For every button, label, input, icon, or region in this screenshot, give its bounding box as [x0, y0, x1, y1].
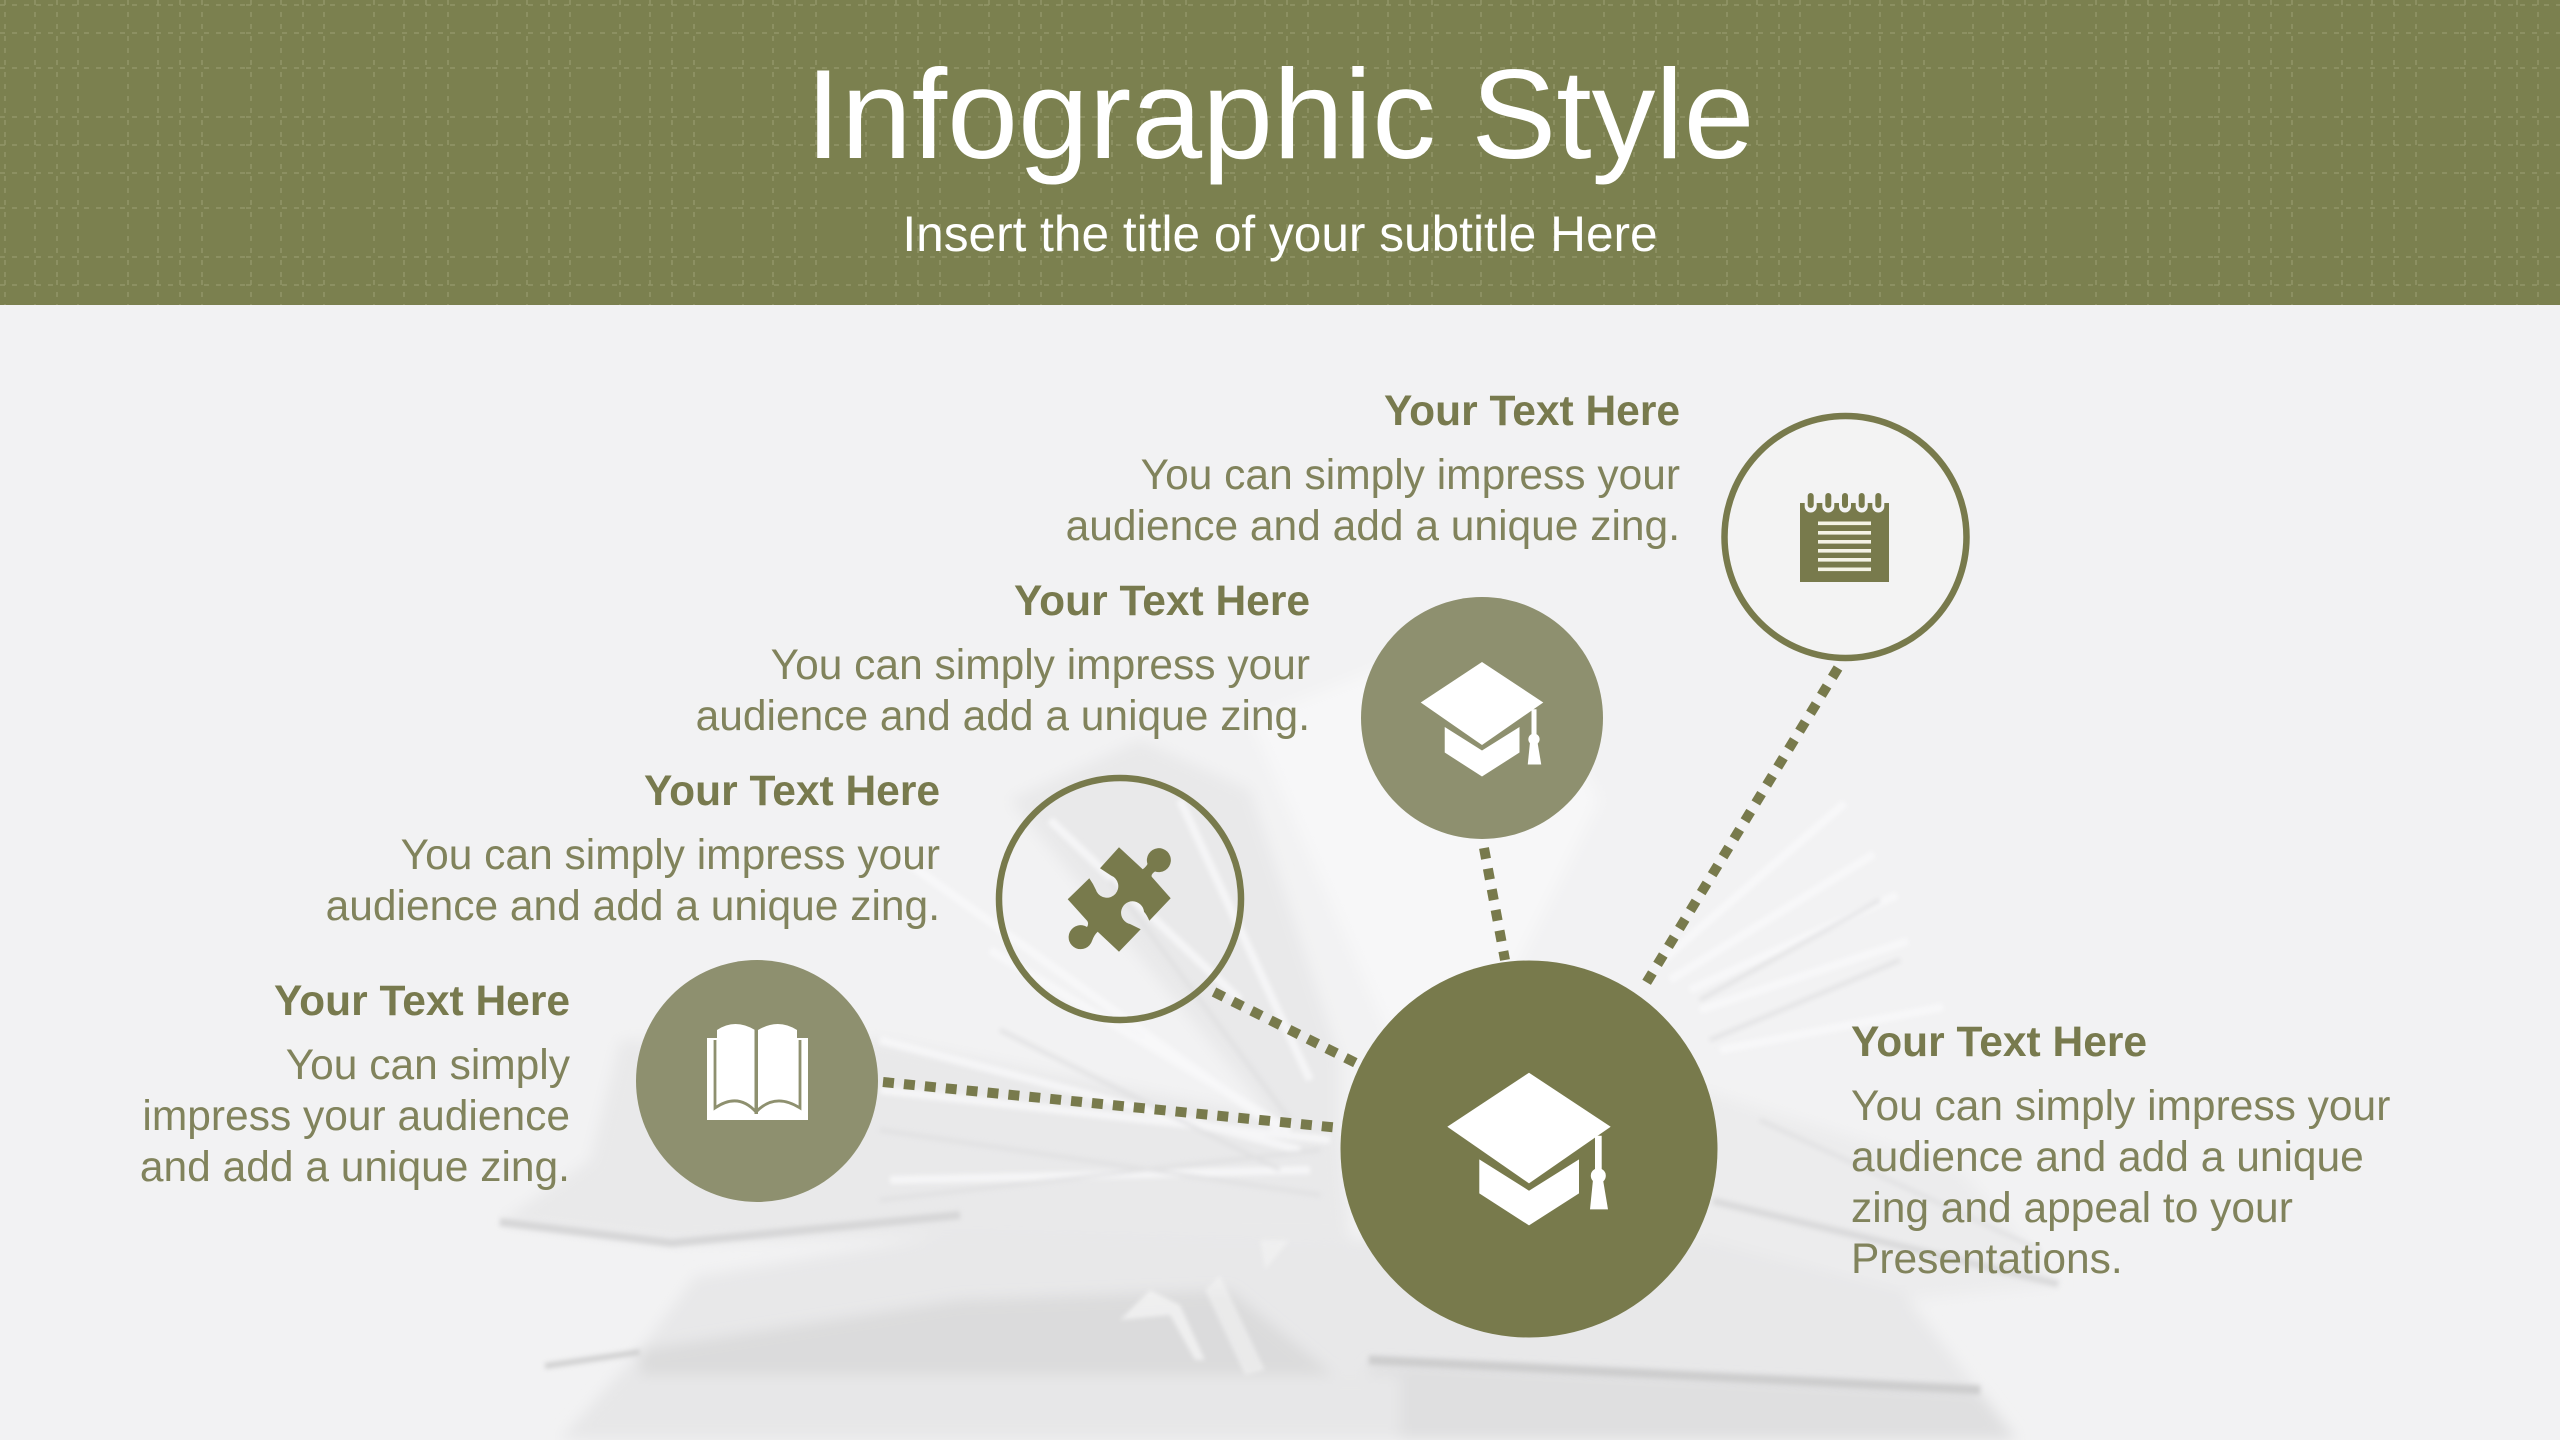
- text block: graduation: [696, 578, 1310, 740]
- text block: notepad: audience and add a unique zing.: [1066, 503, 1680, 550]
- text block: puzzle: Your Text Here: [644, 768, 940, 815]
- text block: main: Presentations.: [1851, 1236, 2123, 1283]
- icon: open book: [707, 1024, 808, 1120]
- icon: puzzle piece: [1068, 847, 1171, 952]
- text block: puzzle: You can simply impress your: [401, 832, 940, 879]
- text block: book: [140, 978, 570, 1191]
- text block: book: You can simply: [286, 1042, 570, 1089]
- text block: main: [1851, 1019, 2390, 1283]
- text block: main: You can simply impress your: [1851, 1083, 2390, 1130]
- text block: graduation: audience and add a unique zing.: [696, 693, 1310, 740]
- text block: notepad: [1066, 388, 1680, 550]
- text block: puzzle: [326, 768, 940, 930]
- text block: book: Your Text Here: [274, 978, 570, 1025]
- text block: puzzle: audience and add a unique zing.: [326, 883, 940, 930]
- icon: graduation cap small: [1421, 662, 1543, 777]
- header band: [0, 0, 2560, 305]
- text block: graduation: Your Text Here: [1014, 578, 1310, 625]
- text block: main: Your Text Here: [1851, 1019, 2147, 1066]
- subtitle: Insert the title of your subtitle Here: [902, 206, 1658, 262]
- text block: notepad: Your Text Here: [1384, 388, 1680, 435]
- text block: graduation: You can simply impress your: [771, 642, 1310, 689]
- text block: book: and add a unique zing.: [140, 1144, 570, 1191]
- text block: notepad: You can simply impress your: [1141, 452, 1680, 499]
- text block: main: zing and appeal to your: [1851, 1185, 2293, 1232]
- icon: graduation cap large: [1447, 1073, 1611, 1225]
- text block: main: audience and add a unique: [1851, 1134, 2364, 1181]
- text block: book: impress your audience: [142, 1093, 570, 1140]
- title: Infographic Style: [806, 43, 1754, 185]
- icon: notepad: [1800, 490, 1889, 582]
